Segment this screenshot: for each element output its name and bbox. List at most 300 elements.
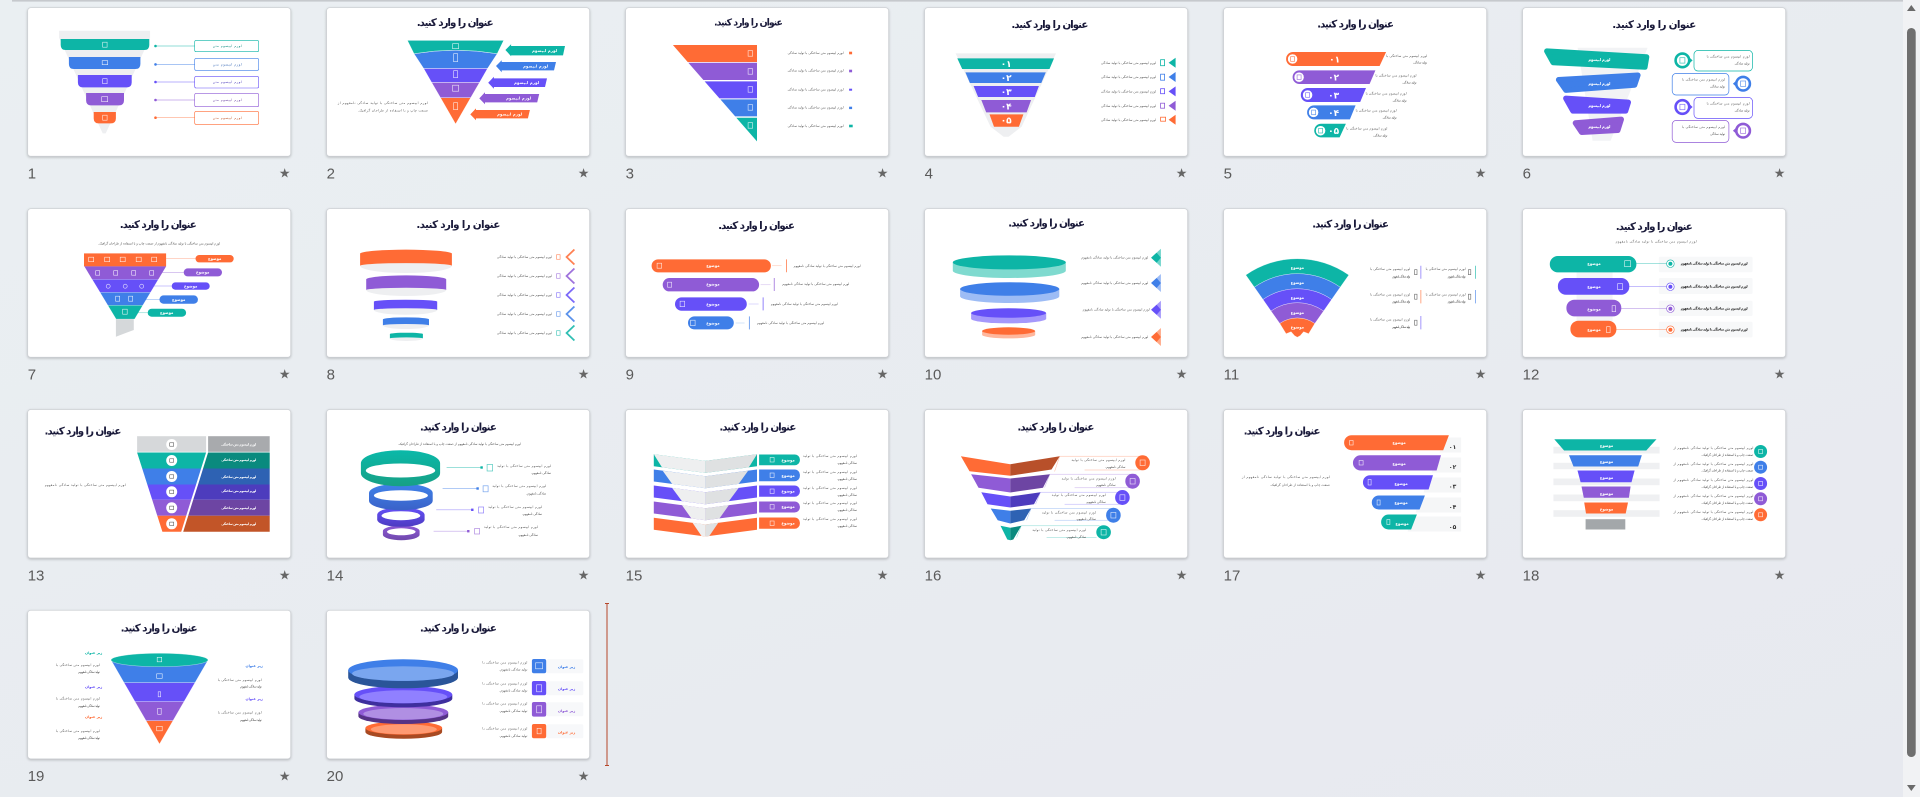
text blocks: لورم ایپسوم متن ساختگی با [1370, 293, 1410, 298]
badge icons [1291, 57, 1323, 133]
funnel bars [1344, 435, 1449, 530]
callout text: تولید سادگی [1710, 132, 1725, 136]
funnel left faces [654, 454, 705, 536]
text list: تولید سادگی [1413, 61, 1427, 65]
pill labels: موضوع [706, 302, 720, 306]
pill labels [1587, 261, 1601, 332]
text list: لورم ایپسوم متن ساختگی با [1386, 54, 1427, 59]
title: عنوان را وارد کنید. [120, 219, 197, 231]
text list: لورم ایپسوم متن ساختگی با تولید [1071, 458, 1125, 463]
body text: صنعت چاپ و با استفاده از طراحان گرافیک. [358, 109, 428, 113]
funnel spout [116, 319, 134, 337]
pill labels: موضوع [706, 321, 720, 326]
scrollbar [1903, 0, 1920, 797]
panel: slide 12 [1523, 209, 1786, 384]
bar labels: موضوع [1394, 500, 1408, 505]
subtitle: لورم ایپسوم متن ساختگی با تولید سادگی نامفهوم از صنعت چاپ و با استفاده از طراحان گرافیک. [98, 242, 220, 247]
text list [1101, 61, 1156, 123]
funnel numbers: ۰۴ [1001, 103, 1012, 113]
right cell text: لورم ایپسوم متن ساختگی [221, 442, 256, 446]
connectors and rules [736, 259, 786, 329]
slide number: 19 [28, 768, 44, 785]
panel: slide 4 [925, 8, 1188, 183]
text blocks: لورم ایپسوم متن ساختگی با [1370, 318, 1410, 323]
text list: لورم ایپسوم متن ساختگی با تولید [803, 517, 857, 522]
text list: لورم ایپسوم متن ساختگی با تولید سادگی [497, 274, 552, 279]
star: ★ [578, 568, 589, 584]
text list: سادگی نامفهوم. [1066, 535, 1087, 540]
text list: سادگی نامفهوم. [1096, 483, 1116, 488]
numbers: ۰۴ [1449, 504, 1457, 511]
slide frame [1523, 209, 1786, 357]
side diamonds [1151, 249, 1161, 346]
funnel icons [157, 657, 162, 731]
discs [953, 255, 1066, 338]
pill icons [1607, 261, 1631, 333]
panel: slide 8 [327, 209, 590, 384]
text list: لورم ایپسوم متن ساختگی با تولید سادگی نامفهوم [757, 321, 824, 326]
tab labels: موضوع [781, 488, 795, 494]
slide frame [327, 410, 590, 558]
slide number: 12 [1523, 366, 1539, 384]
text list: سادگی نامفهوم. [1105, 465, 1126, 470]
text list: سادگی نامفهوم. [531, 471, 551, 476]
text list: لورم ایپسوم متن ساختگی با [482, 727, 527, 732]
star: ★ [877, 167, 888, 182]
funnel labels: موضوع [1600, 475, 1614, 480]
pill labels: موضوع [208, 256, 222, 261]
label text: لورم ایپسوم متن [213, 116, 242, 121]
bar labels: موضوع [1392, 461, 1406, 466]
text list: لورم ایپسوم متن ساختگی با تولید سادگی نامفهوم [1681, 327, 1748, 332]
callout icons [1680, 58, 1746, 133]
slide number: 4 [925, 166, 933, 183]
text blocks: لورم ایپسوم متن ساختگی با [1370, 267, 1410, 272]
title: عنوان را وارد کنید. [1317, 19, 1394, 31]
label strips [547, 659, 583, 738]
list icons [1415, 270, 1471, 325]
title: عنوان را وارد کنید. [417, 17, 494, 29]
tab icons [770, 458, 774, 526]
slide number: 6 [1523, 166, 1531, 183]
text list: سادگی نامفهوم. [1076, 517, 1096, 522]
text list: سادگی نامفهوم. [837, 524, 857, 529]
slide frame [327, 8, 590, 156]
pill labels: موضوع [1587, 327, 1601, 332]
panel: slide 7 [28, 209, 291, 384]
left labels [85, 651, 102, 719]
funnel discs [360, 250, 452, 341]
band labels: لورم ایپسوم [1588, 57, 1611, 62]
slide number: 11 [1224, 366, 1239, 384]
funnel labels: موضوع [1600, 443, 1614, 448]
left text: تولید سادگی نامفهوم. [78, 670, 100, 675]
text list: لورم ایپسوم متن ساختگی با تولید سادگی [497, 331, 552, 336]
text list [803, 454, 857, 529]
slide number: 18 [1523, 567, 1539, 584]
callout circles [1676, 54, 1750, 137]
text list: صنعت چاپ و با استفاده از طراحان گرافیک. [1701, 517, 1754, 521]
funnel numbers: ۰۲ [1001, 74, 1012, 84]
star: ★ [279, 167, 291, 182]
title: عنوان را وارد کنید. [121, 622, 198, 634]
text list: لورم ایپسوم متن ساختگی با تولید سادگی [1101, 90, 1156, 95]
text list: لورم ایپسوم متن ساختگی با تولید [488, 505, 542, 510]
left text: تولید سادگی نامفهوم. [78, 736, 100, 741]
text list: لورم ایپسوم متن ساختگی با تولید سادگی [788, 88, 844, 93]
right labels [246, 664, 263, 701]
text list [497, 255, 552, 336]
icon circles [166, 439, 177, 529]
stacked discs [348, 659, 458, 739]
pills [1550, 256, 1636, 337]
body text [1241, 475, 1330, 487]
slide frame [28, 410, 291, 558]
left labels: زیر عنوان [85, 651, 102, 655]
slide number: 7 [28, 366, 36, 384]
star: ★ [1774, 568, 1785, 584]
panel: slide 16 [925, 410, 1188, 584]
slide frame [1523, 8, 1786, 156]
band labels: لورم ایپسوم [1588, 81, 1611, 86]
title: عنوان را وارد کنید. [1017, 422, 1094, 434]
funnel left faces [961, 456, 1010, 540]
body text: صنعت چاپ و با استفاده از طراحان گرافیک. [1270, 483, 1330, 487]
callout text: لورم ایپسوم متن ساختگی با [1682, 78, 1725, 83]
text blocks [1370, 267, 1466, 330]
text list: سادگی نامفهوم. [526, 492, 547, 496]
star: ★ [1176, 368, 1187, 383]
funnel [407, 40, 504, 124]
pill labels: موضوع [1587, 307, 1601, 312]
star: ★ [1475, 167, 1486, 182]
title: عنوان را وارد کنید. [714, 18, 783, 29]
text list: صنعت چاپ و با استفاده از طراحان گرافیک. [1701, 468, 1754, 472]
text list: سادگی نامفهوم. [837, 508, 857, 513]
tab labels: موضوع [781, 520, 795, 526]
panel: slide 3 [626, 8, 889, 183]
text blocks: تولید سادگی نامفهوم [1392, 299, 1410, 304]
connector lines [434, 468, 482, 531]
text list: سادگی نامفهوم. [522, 512, 542, 517]
panel: slide 20 [327, 610, 590, 785]
right cell text: لورم ایپسوم متن ساختگی [221, 506, 256, 510]
funnel icons [102, 42, 108, 120]
text list: لورم ایپسوم متن ساختگی با [482, 661, 527, 666]
pill labels: موضوع [706, 282, 720, 287]
star: ★ [1475, 568, 1486, 584]
numbers: ۰۳ [1449, 484, 1457, 490]
strip labels: زیر عنوان [558, 709, 575, 713]
left text: لورم ایپسوم متن ساختگی با [56, 663, 100, 668]
panel: slide 11 [1224, 209, 1487, 384]
text blocks: لورم ایپسوم متن ساختگی با [1426, 267, 1466, 272]
backing strip [1577, 269, 1613, 324]
star: ★ [578, 769, 589, 784]
funnel icons [89, 257, 157, 314]
funnel numbers [1001, 60, 1012, 127]
arrow labels: لورم ایپسوم [523, 64, 549, 69]
text list: لورم ایپسوم متن ساختگی با تولید [1032, 528, 1086, 533]
icon glyphs [170, 443, 174, 526]
panel: slide 10 [925, 209, 1188, 384]
star: ★ [1176, 568, 1187, 584]
slide frame [327, 209, 590, 357]
bar icons [1350, 440, 1390, 524]
tilted funnel bands [1547, 51, 1647, 132]
text list: لورم ایپسوم متن ساختگی با تولید سادگی [497, 293, 552, 298]
text list: لورم ایپسوم متن ساختگی با تولید [484, 525, 538, 530]
pill labels: موضوع [706, 263, 720, 268]
callout text: لورم ایپسوم متن ساختگی با [1682, 125, 1725, 130]
text list [1681, 261, 1748, 332]
band labels: لورم ایپسوم [1588, 124, 1611, 129]
text list: لورم ایپسوم متن ساختگی با تولید سادگی نامفهوم از [1672, 478, 1753, 483]
body text [337, 101, 428, 113]
list icons [557, 255, 560, 335]
arrow labels: لورم ایپسوم [506, 96, 532, 101]
right text: لورم ایپسوم متن ساختگی با [218, 678, 262, 683]
text list: لورم ایپسوم متن ساختگی با تولید سادگی [1101, 75, 1156, 80]
tab labels: موضوع [781, 504, 795, 509]
funnel bars [957, 58, 1054, 127]
side icons [1161, 60, 1166, 121]
pill labels [160, 256, 222, 315]
arrow labels: لورم ایپسوم [532, 48, 558, 53]
slide number: 15 [626, 567, 642, 584]
pill labels: موضوع [172, 297, 186, 302]
badge circles [1754, 445, 1767, 521]
slide frame [626, 410, 889, 558]
text blocks: تولید سادگی نامفهوم [1392, 274, 1410, 279]
text blocks: لورم ایپسوم متن ساختگی با [1426, 293, 1466, 298]
funnel labels [1600, 443, 1614, 512]
text list: سادگی نامفهوم. [518, 533, 538, 538]
label text [213, 44, 242, 121]
text list [1081, 256, 1150, 340]
right cell text: لورم ایپسوم متن ساختگی [221, 489, 256, 493]
funnel backing [956, 53, 1056, 137]
text list: لورم ایپسوم متن ساختگی با تولید سادگی نامفهوم [1081, 281, 1148, 286]
funnel icons [453, 44, 459, 110]
panel: slide 5 [1224, 8, 1487, 183]
slide frame [28, 610, 291, 759]
text list: تولید سادگی [1383, 115, 1397, 119]
star: ★ [279, 368, 291, 383]
fan labels: موضوع [1291, 310, 1305, 315]
text list [1032, 458, 1126, 540]
numbers: ۰۲ [1328, 74, 1340, 84]
bar labels: موضوع [1395, 521, 1409, 526]
star: ★ [279, 568, 291, 584]
text list: لورم ایپسوم متن ساختگی با تولید سادگی [1101, 61, 1156, 66]
text frames [1017, 456, 1147, 538]
funnel bars [61, 39, 149, 123]
text list: لورم ایپسوم متن ساختگی با [482, 681, 527, 686]
funnel right faces [1010, 456, 1060, 540]
body text: لورم ایپسوم متن ساختگی با تولید سادگی نامفهوم از [337, 101, 428, 106]
pill labels: موضوع [160, 310, 174, 315]
text list: لورم ایپسوم متن ساختگی با [1356, 108, 1397, 113]
text list: لورم ایپسوم متن ساختگی با تولید سادگی نامفهوم [1081, 256, 1148, 261]
panel: slide 14 [327, 410, 590, 584]
numbers: ۰۵ [1328, 127, 1340, 137]
body text: لورم ایپسوم متن ساختگی با تولید سادگی نامفهوم از [1241, 475, 1330, 480]
tile glyphs [536, 663, 543, 734]
slide frame [626, 8, 889, 156]
numbers: ۰۵ [1449, 524, 1457, 531]
text blocks: تولید سادگی نامفهوم [1448, 299, 1466, 304]
text list: لورم ایپسوم متن ساختگی با تولید [1062, 476, 1116, 482]
text list [1672, 446, 1754, 521]
tab labels [781, 458, 795, 526]
band labels [1588, 57, 1611, 129]
fan labels: موضوع [1291, 324, 1305, 329]
strip labels: زیر عنوان [558, 730, 575, 734]
slide frame [925, 8, 1188, 156]
bar labels [1392, 440, 1409, 526]
fan labels: موضوع [1291, 265, 1305, 270]
body text: لورم ایپسوم متن ساختگی با تولید سادگی نامفهوم [45, 483, 126, 488]
pill labels: موضوع [184, 283, 198, 288]
text list: سادگی نامفهوم. [1086, 500, 1106, 505]
pills [652, 259, 771, 329]
tab labels: موضوع [781, 473, 795, 478]
side markers [1169, 58, 1176, 125]
panel: slide 18 [1523, 410, 1786, 584]
panel: slide 15 [626, 410, 889, 584]
arrow labels [497, 48, 558, 117]
connectors [1616, 264, 1670, 330]
text list: لورم ایپسوم متن ساختگی با تولید سادگی [1101, 104, 1156, 109]
title: عنوان را وارد کنید. [420, 422, 497, 434]
strip labels: زیر عنوان [558, 687, 575, 691]
text list: لورم ایپسوم متن ساختگی با تولید [803, 486, 857, 491]
text list: تولید سادگی نامفهوم. [499, 734, 528, 739]
text list: لورم ایپسوم متن ساختگی با تولید سادگی نامفهوم [771, 302, 838, 307]
label text: لورم ایپسوم متن [213, 44, 242, 49]
panel: slide 1 [28, 8, 291, 183]
target circles [1667, 260, 1674, 334]
text list: صنعت چاپ و با استفاده از طراحان گرافیک. [1701, 453, 1754, 457]
callout text: لورم ایپسوم متن ساختگی با [1707, 55, 1750, 60]
text list: تولید سادگی [1402, 80, 1417, 84]
icon circles [1096, 455, 1150, 539]
slide number: 14 [327, 567, 343, 584]
text list: لورم ایپسوم متن ساختگی با تولید سادگی نامفهوم [782, 282, 849, 287]
slide frame [925, 410, 1188, 558]
funnel numbers: ۰۵ [1001, 117, 1012, 127]
strip labels: زیر عنوان [558, 665, 575, 669]
callout text: تولید سادگی [1710, 85, 1725, 89]
text list: لورم ایپسوم متن ساختگی با تولید سادگی نامفهوم [1681, 284, 1748, 289]
left text: تولید سادگی نامفهوم. [78, 704, 100, 709]
numbers: ۰۳ [1328, 92, 1340, 102]
text list: لورم ایپسوم متن ساختگی با تولید سادگی [788, 124, 844, 129]
pill labels: موضوع [196, 270, 210, 275]
text list: صنعت چاپ و با استفاده از طراحان گرافیک. [1701, 485, 1754, 489]
funnel labels: موضوع [1600, 491, 1614, 496]
list icons [475, 464, 493, 534]
text list: لورم ایپسوم متن ساختگی با تولید [492, 484, 546, 489]
star: ★ [877, 568, 888, 584]
slide number: 1 [28, 166, 36, 183]
text list: لورم ایپسوم متن ساختگی با [1366, 92, 1407, 97]
text list: سادگی نامفهوم. [837, 477, 857, 482]
funnel trapezoids [1554, 439, 1656, 530]
right labels: زیر عنوان [246, 664, 263, 668]
callout text [1682, 55, 1750, 136]
slide frame [626, 209, 889, 357]
target dots [1668, 262, 1672, 332]
strip labels [558, 665, 575, 734]
funnel rings [361, 450, 440, 540]
slide frame [28, 8, 291, 156]
fan chart [1246, 259, 1349, 337]
panel: slide 19 [28, 610, 291, 785]
insertion marker [605, 603, 609, 766]
fan labels: موضوع [1291, 295, 1305, 300]
text list [484, 464, 551, 538]
star: ★ [1774, 167, 1785, 182]
left text: لورم ایپسوم متن ساختگی با [56, 729, 100, 734]
text list: لورم ایپسوم متن ساختگی با تولید سادگی [497, 312, 552, 317]
title: عنوان را وارد کنید. [45, 426, 122, 438]
star: ★ [1475, 368, 1486, 383]
connector dots [467, 466, 483, 532]
text list: لورم ایپسوم متن ساختگی با تولید سادگی [1101, 118, 1156, 123]
label text: لورم ایپسوم متن [213, 80, 242, 85]
text list: لورم ایپسوم متن ساختگی با تولید [1042, 510, 1096, 516]
text list: سادگی نامفهوم. [837, 493, 857, 498]
title: عنوان را وارد کنید. [1244, 426, 1321, 438]
panel: slide 17 [1224, 410, 1487, 584]
right text [218, 678, 262, 723]
star: ★ [1176, 167, 1187, 182]
band labels: لورم ایپسوم [1588, 103, 1611, 108]
slide number: 3 [626, 166, 634, 183]
text list [757, 264, 861, 326]
slide number: 2 [327, 166, 335, 183]
label tabs [759, 454, 800, 529]
left text: لورم ایپسوم متن ساختگی با [56, 697, 100, 702]
text blocks: تولید سادگی نامفهوم [1392, 325, 1410, 330]
bar labels: موضوع [1394, 481, 1408, 486]
subtitle: لورم ایپسوم متن ساختگی با تولید سادگی نامفهوم [1616, 240, 1697, 245]
text list: لورم ایپسوم متن ساختگی با [1375, 74, 1417, 79]
slide number: 9 [626, 366, 634, 384]
callout text: تولید سادگی [1735, 109, 1750, 113]
text list: تولید سادگی [1373, 133, 1388, 137]
label text: لورم ایپسوم متن [213, 98, 242, 103]
pill labels: موضوع [1587, 261, 1601, 266]
pill labels: موضوع [1587, 284, 1601, 289]
numbers: ۰۴ [1328, 109, 1340, 119]
subtitle: لورم ایپسوم متن ساختگی با تولید سادگی نامفهوم از صنعت چاپ و با استفاده از طراحان گرافیک. [398, 442, 521, 447]
text list: لورم ایپسوم متن ساختگی با تولید [497, 464, 551, 469]
vertical rules [1421, 266, 1475, 329]
text list: لورم ایپسوم متن ساختگی با تولید سادگی نامفهوم از [1672, 462, 1753, 467]
title: عنوان را وارد کنید. [718, 220, 795, 232]
star: ★ [877, 368, 888, 383]
star: ★ [578, 167, 589, 182]
fan labels: موضوع [1291, 280, 1305, 285]
left text [56, 663, 100, 741]
connectors [156, 46, 195, 118]
title: عنوان را وارد کنید. [719, 422, 796, 434]
numbers: ۰۱ [1329, 56, 1340, 66]
right text: تولید سادگی نامفهوم. [240, 718, 262, 723]
